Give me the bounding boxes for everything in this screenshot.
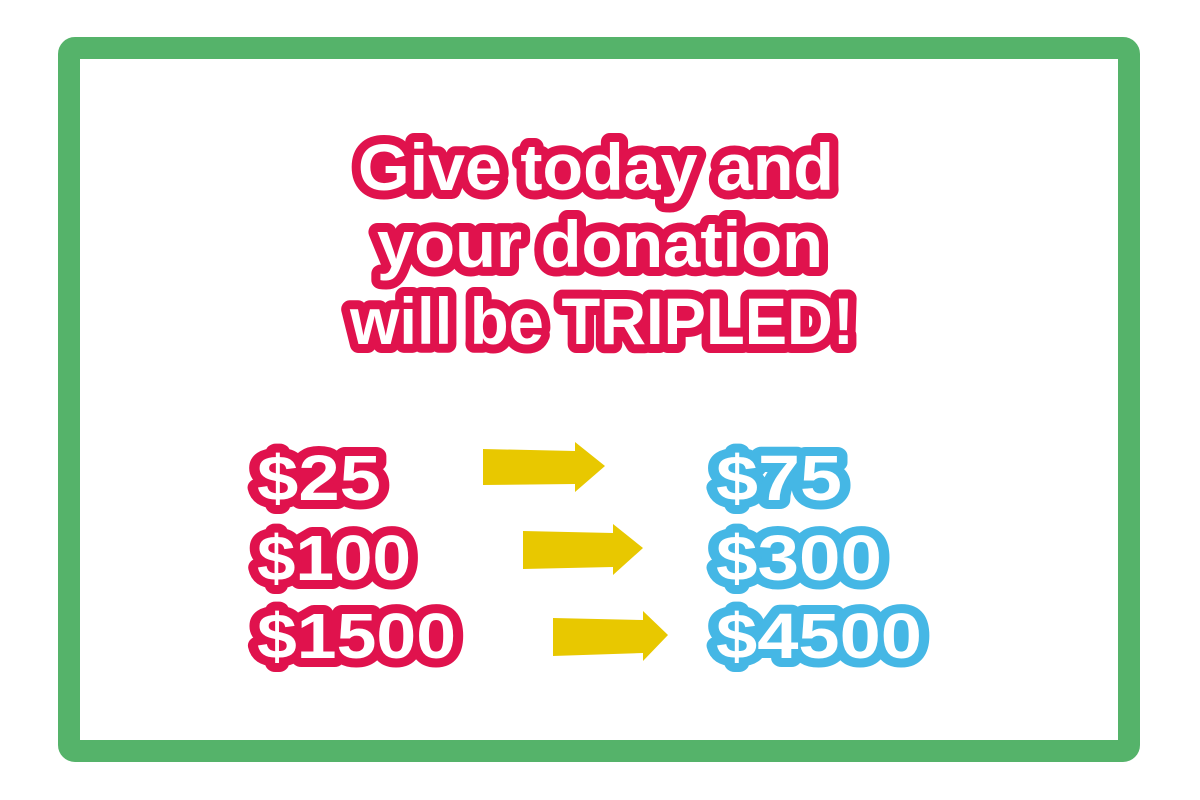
title [349, 130, 854, 358]
arrows [483, 442, 668, 661]
tripled amounts: $75 [716, 442, 842, 514]
tripled amounts [716, 442, 922, 672]
tripled amounts: $4500 [716, 600, 922, 672]
original amounts: $25 [257, 442, 381, 514]
title: your donation [377, 207, 823, 281]
title: will be TRIPLED! [349, 284, 854, 358]
tripled amounts: $300 [716, 522, 882, 594]
green frame [69, 48, 1129, 751]
original amounts [257, 442, 456, 672]
original amounts: $100 [257, 522, 411, 594]
title: Give today and [358, 130, 834, 204]
original amounts: $1500 [257, 600, 456, 672]
